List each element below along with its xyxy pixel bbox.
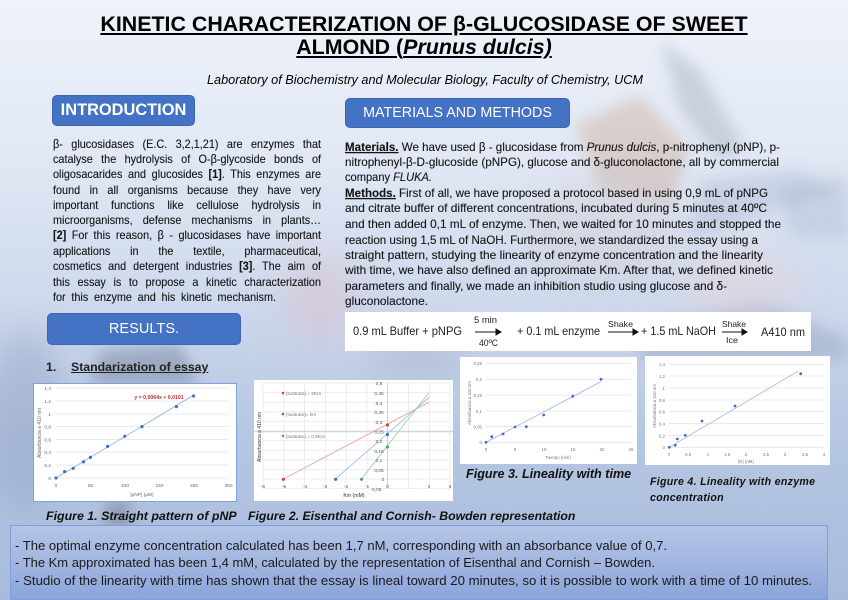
chart: figure 1 straight pattern of pNP: 200 [190,483,198,489]
chart: figure 4 lineality with enzyme concentration: 1 [663,386,666,391]
chart: figure 2 Eisenthal and Cornish-Bowden: -1 [365,484,369,490]
chart: figure 1 straight pattern of pNP [33,383,237,502]
heading: introduction: INTRODUCTION [61,101,186,119]
reaction scheme: + 0.1 mL enzyme [517,324,600,338]
chart: figure 2 Eisenthal and Cornish-Bowden: 0,35 [374,410,384,416]
chart: figure 1 straight pattern of pNP: [pNP] (µM) [130,492,154,498]
chart: figure 3 lineality with time: 20 [600,447,605,452]
chart: figure 2 Eisenthal and Cornish-Bowden: -5 [282,484,286,490]
title: ALMOND (Prunus dulcis) [296,35,552,59]
text block: introduction: oligosacarides and glucosides [1]. This enzymes are [53,167,321,181]
chart: figure 2 Eisenthal and Cornish-Bowden: 0,15 [374,449,384,455]
chart: figure 3 lineality with time: Tiempo (min) [545,455,571,460]
subtitle: affiliation: Laboratory of Biochemistry and Molecular Biology, Faculty of Chemistry, UCM [207,73,643,87]
chart: figure 2 Eisenthal and Cornish-Bowden: Km (mM) [343,493,365,499]
text block: introduction: β- glucosidases (E.C. 3,2,1,21) are enzymes that [53,136,321,150]
panel: conclusions: - The optimal enzyme concentration calculated has been 1,7 nM, corresponding with an absorbance value of 0,7. [15,539,667,553]
reaction scheme [345,312,811,351]
chart: figure 2 Eisenthal and Cornish-Bowden [254,380,453,501]
chart: figure 2 Eisenthal and Cornish-Bowden: -2 [344,484,348,490]
chart: figure 4 lineality with enzyme concentration: 0,6 [659,410,666,414]
caption: figure 4: Figure 4. Lineality with enzyme [650,476,815,488]
subheading: standarization of essay: Standarization of essay [71,360,208,374]
chart: figure 3 lineality with time: 0,2 [476,377,483,382]
chart: figure 4 lineality with enzyme concentration: 2 [745,452,748,457]
chart: figure 1 straight pattern of pNP: 0,6 [44,438,51,444]
chart: figure 4 lineality with enzyme concentration: 3,5 [802,452,809,457]
text block: introduction: for this enzyme and his kinetic mechanism. [53,290,276,304]
chart: figure 4 lineality with enzyme concentration: 4 [823,452,826,457]
reaction scheme: 0.9 mL Buffer + pNPG [353,324,462,338]
chart: figure 4 lineality with enzyme concentration: 1,4 [659,362,666,367]
panel: conclusions: - The Km approximated has been 1,4 mM, calculated by the representation of Eisenthal and Cornish – Bowden. [15,556,655,570]
caption: figure 4: concentration [650,492,724,504]
reaction scheme: 40ºC [479,338,498,349]
chart: figure 1 straight pattern of pNP: 50 [88,483,93,489]
chart: figure 3 lineality with time: 0 [485,447,488,452]
chart: figure 4 lineality with enzyme concentration: 0,4 [659,422,666,426]
reaction scheme: 5 min [474,315,497,326]
chart: figure 3 lineality with time: 0,25 [473,361,483,366]
heading: results: RESULTS. [109,321,179,337]
text block: introduction: this essay is to propose a kinetic characterization [53,274,321,288]
chart: figure 2 Eisenthal and Cornish-Bowden: 0,4 [376,401,383,407]
chart: figure 1 straight pattern of pNP: 250 [224,483,233,489]
text block: introduction: applications in the textile, pharmaceutical, [53,244,321,258]
chart: figure 3 lineality with time: 15 [571,447,576,452]
text block: materials and methods: with time, we have also defined an approximate Km. After that, we defined kinetic [345,263,773,277]
chart: figure 1 straight pattern of pNP: 100 [121,483,129,489]
chart: figure 2 Eisenthal and Cornish-Bowden: 0,5 [376,381,383,387]
chart: figure 1 straight pattern of pNP: 150 [155,483,164,489]
chart: figure 2 Eisenthal and Cornish-Bowden: 3 [449,484,452,490]
chart: figure 2 Eisenthal and Cornish-Bowden: 0 [386,484,389,490]
text block: materials and methods: parameters and finally, we made an inhibition studio using glucose and δ- [345,279,727,293]
chart: figure 3 lineality with time: 0,15 [473,393,483,398]
chart: figure 1 straight pattern of pNP: 0 [48,476,51,482]
chart: figure 2 Eisenthal and Cornish-Bowden: 0,1 [376,458,383,464]
chart: figure 1 straight pattern of pNP: 0,8 [44,424,51,430]
title: KINETIC CHARACTERIZATION OF β-GLUCOSIDASE OF SWEET [100,12,748,36]
chart: figure 1 straight pattern of pNP: Absorbancia a 410 nm [37,408,43,458]
reaction scheme: + 1.5 mL NaOH [641,324,716,338]
chart: figure 2 Eisenthal and Cornish-Bowden: 0,25 [374,430,384,436]
chart: figure 2 Eisenthal and Cornish-Bowden: [sustrato]= km [286,412,316,418]
text block: introduction: important functions like cellulose hydrolysis in [53,198,321,212]
chart: figure 3 lineality with time: 25 [629,447,634,452]
chart: figure 4 lineality with enzyme concentration: 0,5 [685,452,692,457]
chart: figure 4 lineality with enzyme concentration: 3 [784,452,787,457]
chart: figure 4 lineality with enzyme concentration: Absorbancia a 410 nm [652,384,657,428]
text block: materials and methods: gluconolactone. [345,294,428,308]
reaction scheme: Shake [722,319,746,329]
text block: materials and methods: and then added 0,1 mL of enzyme. Then, we waited for 10 minutes and stopped the [345,217,781,231]
chart: figure 4 lineality with enzyme concentration: 0,8 [659,398,666,403]
chart: figure 4 lineality with enzyme concentration: 0 [663,445,666,450]
chart: figure 3 lineality with time: 5 [514,447,517,452]
text block: introduction: [2] For this reason, β - glucosidases have important [53,228,321,242]
chart: figure 2 Eisenthal and Cornish-Bowden: 0,3 [376,420,383,426]
chart: figure 1 straight pattern of pNP: y = 0,0064x + 0,0101 [134,395,184,401]
text block: materials and methods: Materials. We have used β - glucosidase from Prunus dulcis, p-nitrophenyl (pNP), p- [345,140,780,154]
text block: introduction: catalyse the hydrolysis of O-β-glycoside bonds of [53,152,321,166]
heading: materials and methods [345,98,570,128]
text block: materials and methods: nitrophenyl-β-D-glucoside (pNPG), glucose and δ-gluconolactone, all by commercial [345,155,779,169]
text block: introduction: found in all organisms because they have very [53,182,321,196]
chart: figure 4 lineality with enzyme concentration: 2,5 [763,452,770,457]
subheading: standarization of essay: 1. [46,360,56,374]
chart: figure 4 lineality with enzyme concentration: 0 [668,452,671,457]
text block: introduction [53,136,322,304]
chart: figure 2 Eisenthal and Cornish-Bowden: 0 [382,477,385,483]
heading: introduction [52,95,195,126]
chart: figure 1 straight pattern of pNP: 1 [48,412,51,418]
text block: materials and methods: company FLUKA. [345,170,432,184]
caption: figure 4 [650,476,815,504]
reaction scheme: Ice [726,335,738,345]
caption: figure 1: Figure 1. Straight pattern of pNP [46,509,237,523]
chart: figure 4 lineality with enzyme concentration: 1,5 [724,452,731,457]
chart: figure 2 Eisenthal and Cornish-Bowden: [sustrato] = 2Km [286,391,321,397]
chart: figure 4 lineality with enzyme concentration: 1,2 [659,374,666,379]
text block: materials and methods: Methods. First of all, we have proposed a protocol based in using 0,9 mL of pNPG [345,186,768,200]
chart: figure 2 Eisenthal and Cornish-Bowden: 0,2 [376,439,383,445]
caption: figure 2: Figure 2. Eisenthal and Cornish- Bowden representation [248,509,575,523]
chart: figure 1 straight pattern of pNP: 0 [55,483,58,489]
reaction scheme: Shake [608,319,633,329]
chart: figure 4 lineality with enzyme concentration: 0,2 [659,434,666,438]
chart: figure 2 Eisenthal and Cornish-Bowden: [sustrato] = 0.5Km [286,434,325,440]
text block: introduction: cosmetics and detergent industries [3]. The aim of [53,259,321,273]
text block: materials and methods [345,140,781,308]
text block: materials and methods: and citrate buffer of different concentrations, incubated during 5 minutes at 40ºC [345,201,767,215]
chart: figure 3 lineality with time: 10 [542,447,547,452]
heading: results [47,313,241,345]
chart: figure 1 straight pattern of pNP: 0,4 [44,450,51,456]
chart: figure 1 straight pattern of pNP: 1,2 [44,399,51,405]
panel: conclusions [10,525,828,600]
chart: figure 2 Eisenthal and Cornish-Bowden: -6 [261,484,265,490]
chart: figure 2 Eisenthal and Cornish-Bowden: -3 [323,484,327,490]
caption: figure 3: Figure 3. Lineality with time [466,467,631,481]
chart: figure 1 straight pattern of pNP: 1,4 [44,386,51,392]
chart: figure 1 straight pattern of pNP: 0,2 [44,463,51,469]
chart: figure 4 lineality with enzyme concentration: [E] (nM) [738,459,754,464]
reaction scheme: A410 nm [761,325,805,339]
chart: figure 2 Eisenthal and Cornish-Bowden: 2 [428,484,431,490]
title [100,12,748,59]
chart: figure 2 Eisenthal and Cornish-Bowden: 0,05 [374,468,384,474]
panel: conclusions: - Studio of the linearity with time has shown that the essay is lineal toward 20 minutes, so it is possible to work with a time of 10 minutes. [15,574,812,588]
chart: figure 2 Eisenthal and Cornish-Bowden: -0,05 [371,487,382,493]
heading: materials and methods: MATERIALS AND METHODS [363,105,552,121]
chart: figure 3 lineality with time: 0 [480,440,483,445]
chart: figure 3 lineality with time: 0,1 [476,409,483,414]
chart: figure 2 Eisenthal and Cornish-Bowden: 0,45 [374,391,384,397]
text block: materials and methods: reaction using 1,5 mL of NaOH. Furthermore, we standardized the essay using a [345,233,758,247]
chart: figure 3 lineality with time: 0,05 [473,424,483,430]
text block: materials and methods: straight pattern, studying the linearity of enzyme concentration and the linearity [345,248,763,262]
chart: figure 3 lineality with time [460,357,637,464]
text block: introduction: microorganisms, defense mechanisms in plants… [53,213,321,227]
chart: figure 2 Eisenthal and Cornish-Bowden: -4 [303,484,307,490]
chart: figure 4 lineality with enzyme concentration [645,356,830,465]
chart: figure 3 lineality with time: Absorbancia a 410 nm [467,381,472,425]
chart: figure 2 Eisenthal and Cornish-Bowden: Absorbancia a 410 nm [257,412,263,462]
chart: figure 4 lineality with enzyme concentration: 1 [707,452,710,457]
